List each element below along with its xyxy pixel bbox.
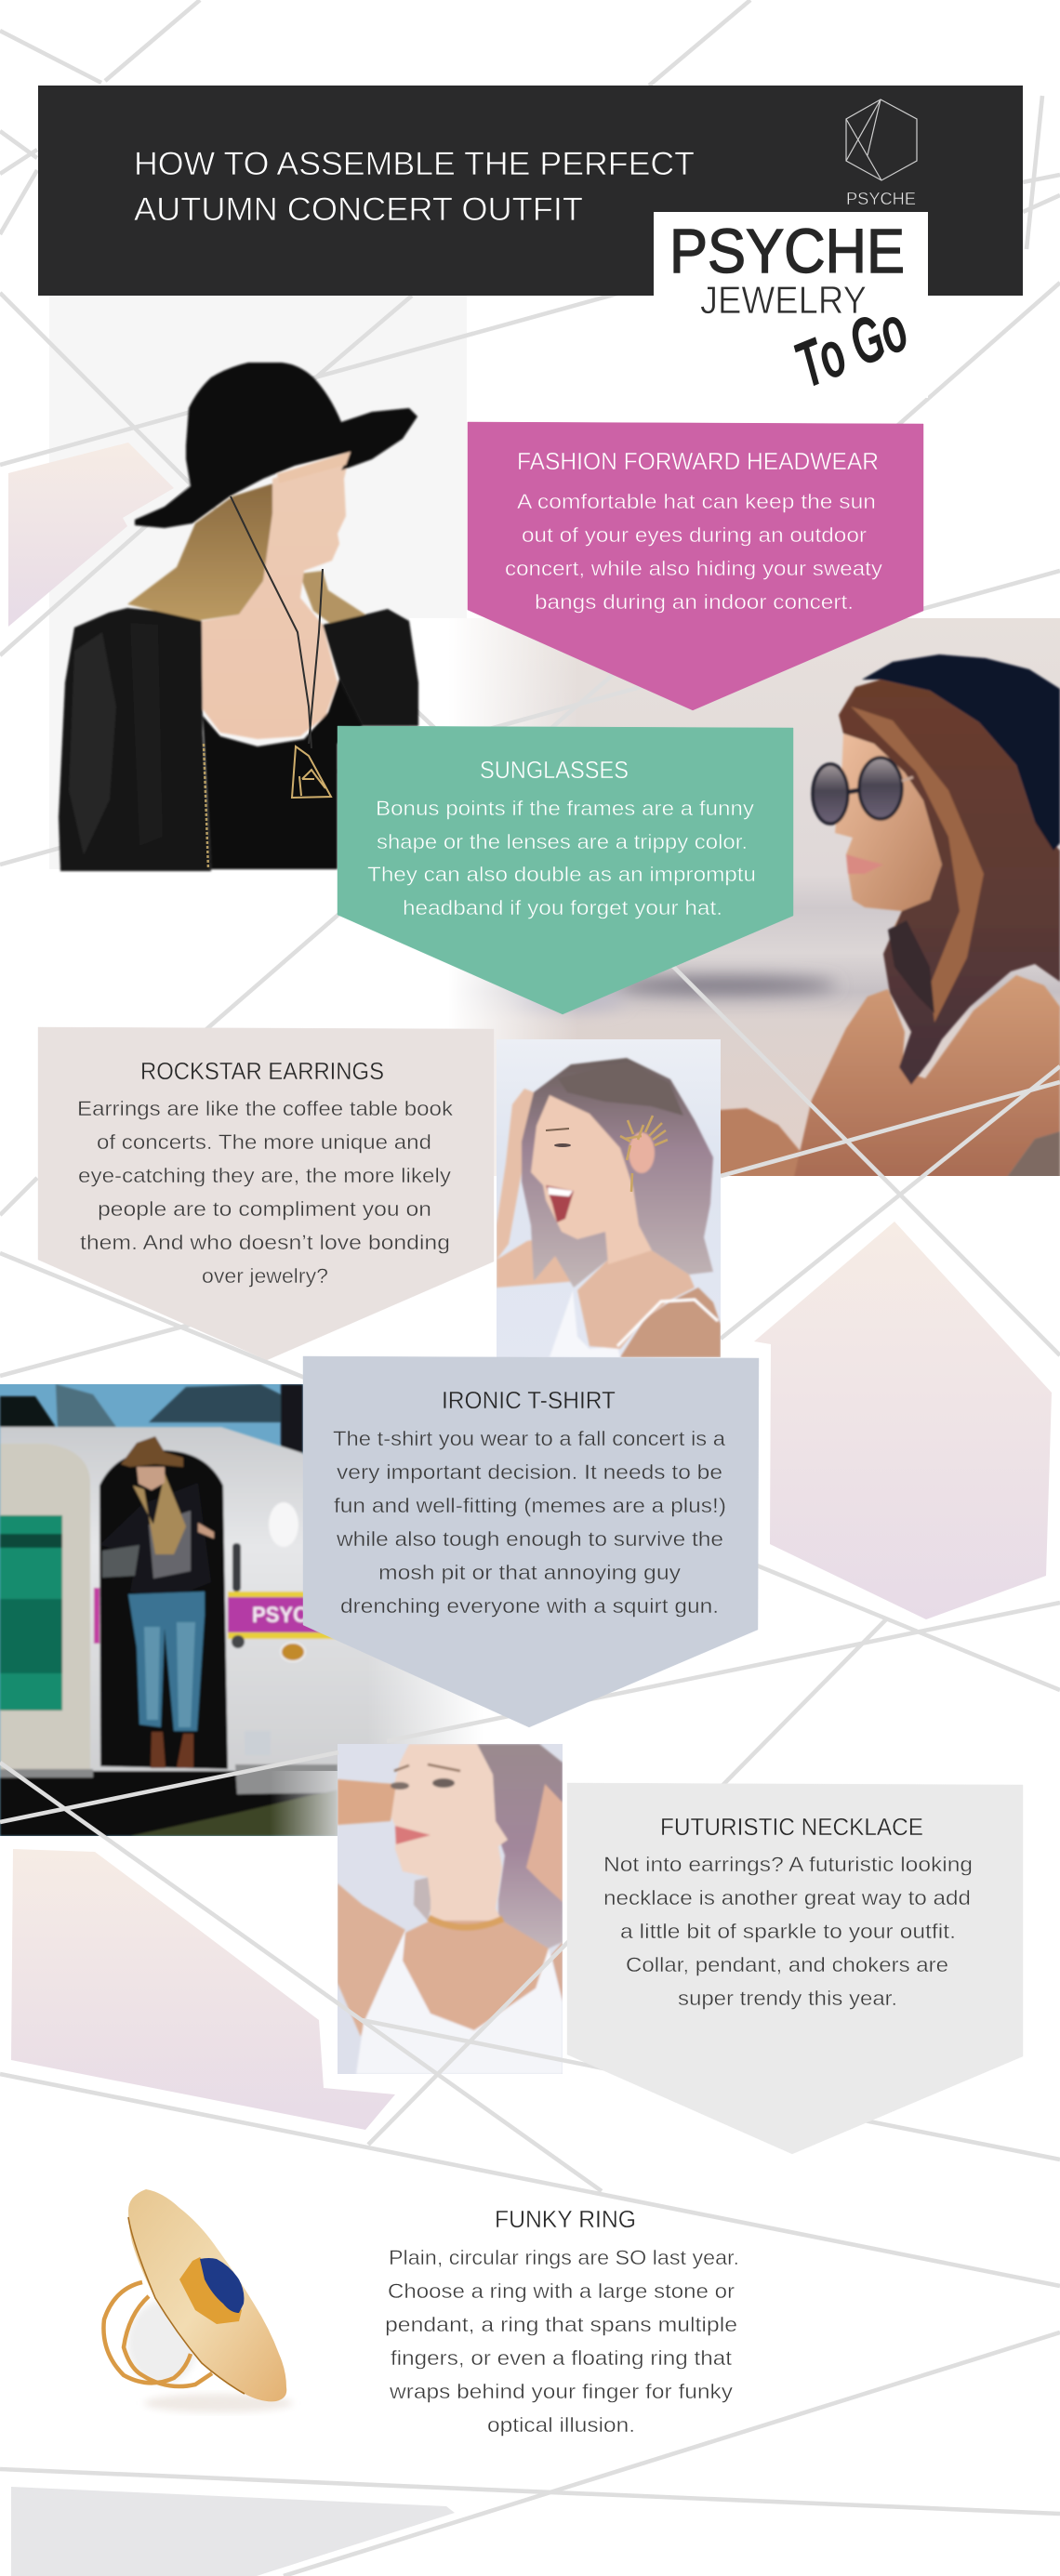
logo: psyche jewelry to go: To Go: [785, 292, 918, 402]
body text: a little bit of sparkle to your outfit.: [620, 1920, 956, 1943]
panel: ironic t-shirt: [303, 1356, 759, 1727]
body text: while also tough enough to survive the: [336, 1527, 723, 1551]
photo: model in black wide-brim hat: [0, 0, 418, 871]
icon: psyche hexagon logo: [846, 99, 917, 180]
panel: funky ring text: [385, 2205, 739, 2437]
body text: concert, while also hiding your sweaty: [505, 557, 882, 580]
title: AUTUMN CONCERT OUTFIT: [134, 192, 583, 228]
body text: Plain, circular rings are SO last year.: [389, 2246, 739, 2269]
photo: model with gold choker: [338, 1744, 563, 2074]
photo: woman in beanie and sunglasses: [409, 618, 1060, 1181]
body text: necklace is another great way to add: [603, 1886, 971, 1909]
photo: woman at airstream trailer: PSYC: [252, 1603, 308, 1628]
body text: Not into earrings? A futuristic looking: [603, 1853, 973, 1876]
body text: The t-shirt you wear to a fall concert is a: [333, 1427, 726, 1450]
body text: eye-catching they are, the more likely: [78, 1164, 451, 1187]
body text: fingers, or even a floating ring that: [391, 2346, 732, 2370]
body text: [505, 490, 882, 614]
body text: super trendy this year.: [678, 1987, 897, 2010]
logo: psyche jewelry to go: JEWELRY: [700, 278, 867, 322]
body text: [603, 1853, 973, 2010]
body text: people are to compliment you on: [98, 1197, 431, 1221]
heading: FUTURISTIC NECKLACE: [660, 1813, 923, 1841]
photo: woman at airstream trailer: [0, 1384, 463, 1836]
panel: rockstar earrings: [38, 1027, 494, 1360]
logo wordmark: PSYCHE: [846, 190, 916, 208]
title banner: [38, 86, 1023, 296]
heading: SUNGLASSES: [480, 756, 629, 784]
title: HOW TO ASSEMBLE THE PERFECT: [134, 146, 695, 182]
panel: sunglasses: [338, 726, 793, 1014]
body text: Bonus points if the frames are a funny: [376, 797, 754, 820]
heading: FASHION FORWARD HEADWEAR: [517, 447, 879, 475]
logo: psyche jewelry to go: [654, 212, 928, 402]
body text: wraps behind your finger for funky: [389, 2380, 733, 2403]
body text: [367, 797, 756, 919]
body text: mosh pit or that annoying guy: [378, 1561, 681, 1584]
body text: fun and well-fitting (memes are a plus!): [334, 1494, 726, 1517]
body text: very important decision. It needs to be: [337, 1460, 722, 1484]
decorative pale shape: lower left: [11, 1849, 395, 2130]
body text: Choose a ring with a large stone or: [388, 2279, 735, 2303]
decorative pale shape: right: [754, 1222, 1052, 1619]
panel: fashion forward headwear: [468, 422, 923, 710]
body text: [77, 1097, 454, 1288]
body text: them. And who doesn’t love bonding: [80, 1231, 450, 1254]
body text: [333, 1427, 726, 1618]
heading: IRONIC T-SHIRT: [442, 1386, 616, 1414]
body text: headband if you forget your hat.: [403, 896, 722, 919]
body text: A comfortable hat can keep the sun: [517, 490, 876, 513]
body text: Earrings are like the coffee table book: [77, 1097, 454, 1120]
photo: laughing model with ear cuff: [497, 1039, 721, 1357]
decorative pale shape: upper left: [8, 443, 174, 627]
body text: drenching everyone with a squirt gun.: [340, 1594, 719, 1618]
body text: of concerts. The more unique and: [97, 1130, 431, 1154]
body text: [385, 2246, 739, 2437]
logo: psyche jewelry to go: PSYCHE: [669, 217, 905, 286]
photo backdrop: hat model: [49, 296, 467, 869]
photo: gold ring with lapis stone: [103, 2189, 293, 2412]
body text: over jewelry?: [202, 1264, 328, 1288]
body text: out of your eyes during an outdoor: [522, 523, 867, 547]
panel: futuristic necklace: [567, 1783, 1023, 2154]
body text: pendant, a ring that spans multiple: [385, 2313, 737, 2336]
title: [134, 146, 695, 228]
body text: shape or the lenses are a trippy color.: [377, 830, 748, 853]
body text: They can also double as an impromptu: [367, 863, 756, 886]
heading: FUNKY RING: [495, 2205, 636, 2233]
heading: ROCKSTAR EARRINGS: [140, 1057, 384, 1085]
body text: bangs during an indoor concert.: [535, 590, 854, 614]
decorative grey shape: bottom left: [11, 2487, 455, 2576]
body text: optical illusion.: [487, 2413, 635, 2437]
body text: Collar, pendant, and chokers are: [626, 1953, 948, 1976]
